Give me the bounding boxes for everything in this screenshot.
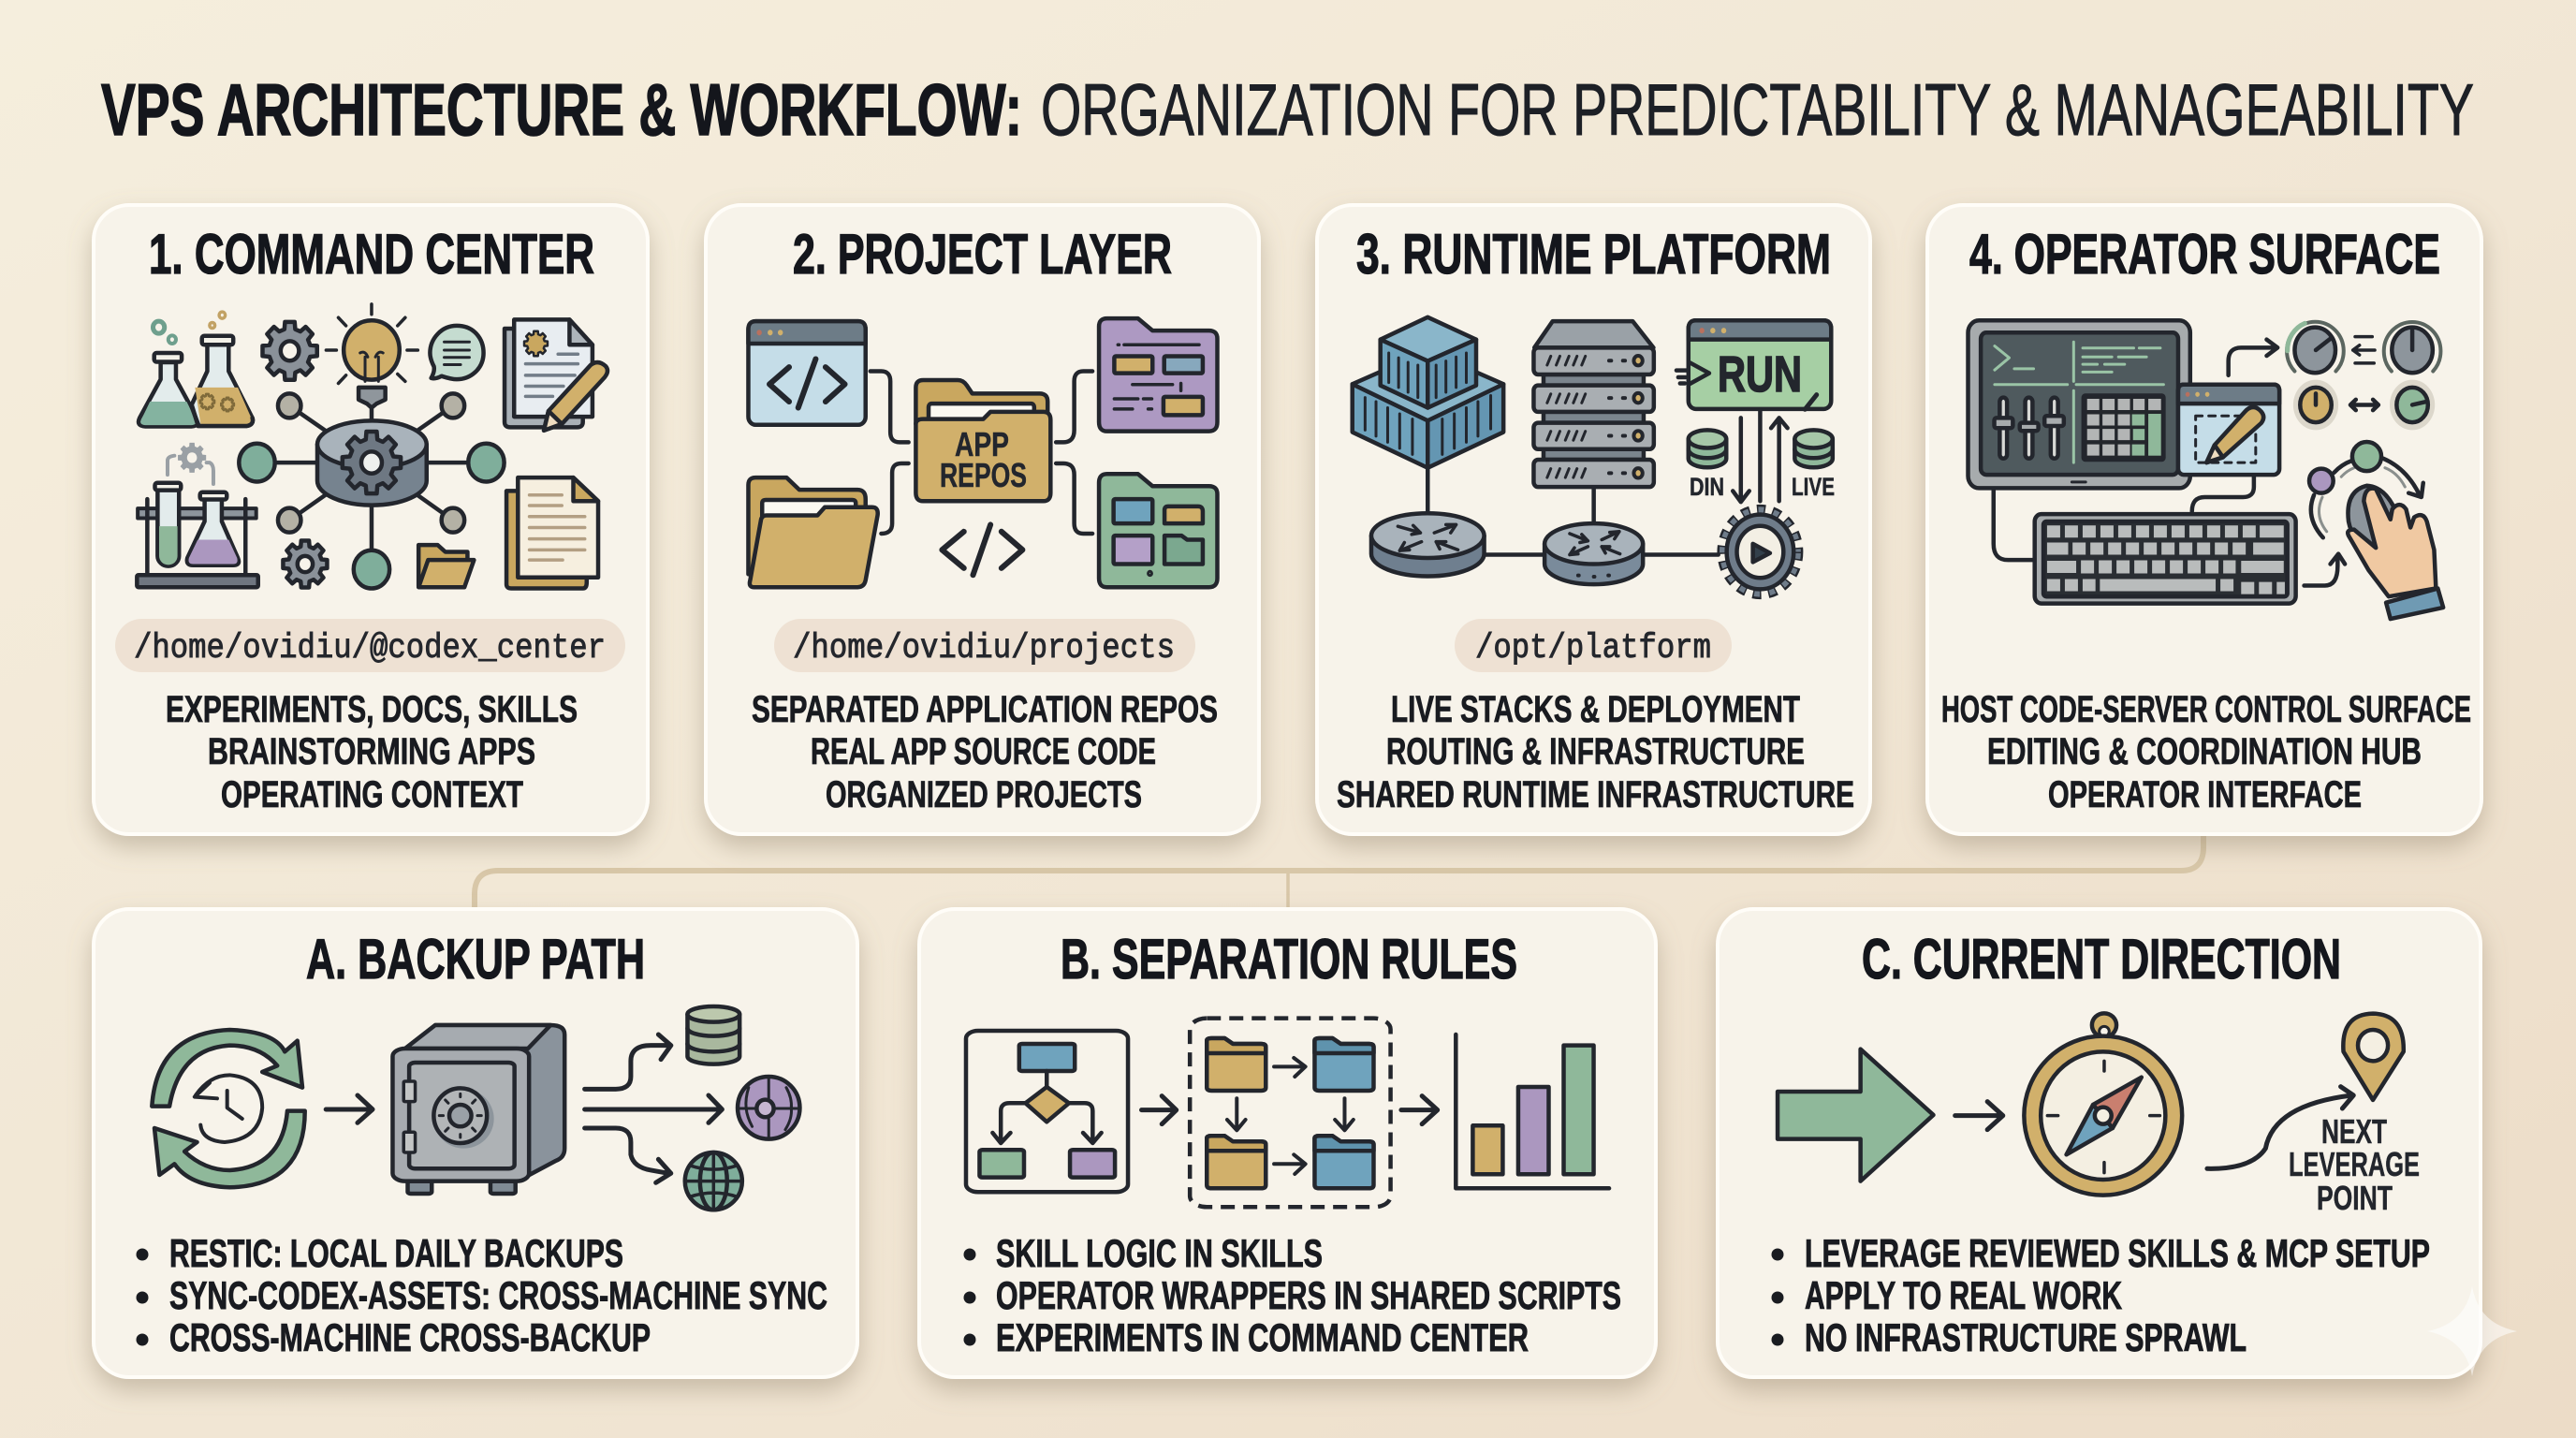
illustration: app repos folders	[748, 318, 1217, 587]
pin label: next leverage point: LEVERAGE	[2289, 1145, 2420, 1183]
title	[101, 68, 2474, 151]
description: runtime platform	[1337, 689, 1854, 815]
panel: backup path	[94, 909, 857, 1377]
terminal labels: run, din, live: RUN	[1718, 346, 1802, 403]
title: VPS ARCHITECTURE & WORKFLOW:	[101, 68, 1022, 151]
panel: operator surface	[1927, 205, 2481, 834]
terminal labels: run, din, live: DIN	[1690, 473, 1724, 501]
pin label: next leverage point: POINT	[2317, 1179, 2393, 1217]
path pill: opt platform	[1455, 619, 1732, 672]
pin label: next leverage point: NEXT	[2321, 1112, 2387, 1151]
description: operator surface: OPERATOR INTERFACE	[2048, 774, 2362, 815]
heading: current direction: C. CURRENT DIRECTION	[1862, 928, 2341, 990]
description: runtime platform: ROUTING & INFRASTRUCTURE	[1386, 731, 1805, 772]
description: project layer: ORGANIZED PROJECTS	[826, 774, 1142, 815]
bullet list: backup path	[137, 1231, 827, 1359]
bullet list: current direction: NO INFRASTRUCTURE SPRAWL	[1805, 1315, 2247, 1359]
folder label: app repos	[940, 425, 1027, 494]
bullet list: separation rules: SKILL LOGIC IN SKILLS	[996, 1231, 1323, 1275]
bullet list: separation rules	[964, 1231, 1621, 1359]
bullet list: current direction	[1771, 1231, 2430, 1359]
description: command center: EXPERIMENTS, DOCS, SKILLS	[166, 689, 578, 730]
path pill: codex center	[115, 619, 625, 672]
bullet list: separation rules: OPERATOR WRAPPERS IN SHARED SCRIPTS	[996, 1273, 1621, 1317]
panel: separation rules	[919, 909, 1656, 1377]
terminal labels: run, din, live: LIVE	[1792, 473, 1835, 501]
bullet list: backup path: SYNC-CODEX-ASSETS: CROSS-MACHINE SYNC	[169, 1273, 827, 1317]
path pill: opt platform: /opt/platform	[1475, 629, 1711, 668]
description: command center: OPERATING CONTEXT	[221, 774, 523, 815]
icon: sparkle watermark	[2427, 1286, 2517, 1376]
illustration: command center hub	[137, 304, 607, 589]
description: operator surface: EDITING & COORDINATION HUB	[1987, 731, 2422, 772]
illustration: backup to safe to targets	[152, 1006, 799, 1210]
panel: command center	[94, 205, 648, 834]
panel: current direction	[1718, 909, 2481, 1377]
terminal labels: run, din, live	[1690, 346, 1835, 501]
folder label: app repos: APP	[955, 425, 1009, 463]
description: runtime platform: SHARED RUNTIME INFRASTRUCTURE	[1337, 774, 1854, 815]
description: project layer: REAL APP SOURCE CODE	[811, 731, 1156, 772]
connector lines between rows	[475, 836, 2203, 907]
illustration: runtime containers, servers, routers	[1353, 317, 1833, 594]
panel: project layer	[706, 205, 1259, 834]
bullet list: backup path: RESTIC: LOCAL DAILY BACKUPS	[169, 1231, 623, 1275]
description: project layer: SEPARATED APPLICATION REPOS	[752, 689, 1218, 730]
heading: backup path: A. BACKUP PATH	[306, 928, 645, 990]
panel: runtime platform	[1317, 205, 1870, 834]
description: command center: BRAINSTORMING APPS	[208, 731, 535, 772]
description: project layer	[752, 689, 1218, 815]
heading: project layer: 2. PROJECT LAYER	[793, 223, 1172, 286]
illustration: arrow, compass, map pin	[1778, 1013, 2404, 1196]
heading: separation rules: B. SEPARATION RULES	[1061, 928, 1517, 990]
path pill: codex center: /home/ovidiu/@codex_center	[134, 629, 606, 668]
bullet list: separation rules: EXPERIMENTS IN COMMAND CENTER	[996, 1315, 1529, 1359]
pin label: next leverage point	[2289, 1112, 2420, 1217]
heading: runtime platform: 3. RUNTIME PLATFORM	[1356, 223, 1831, 286]
bullet list: current direction: APPLY TO REAL WORK	[1805, 1273, 2122, 1317]
description: operator surface	[1941, 689, 2471, 815]
heading: command center: 1. COMMAND CENTER	[149, 223, 594, 286]
description: command center	[166, 689, 578, 815]
bullet list: backup path: CROSS-MACHINE CROSS-BACKUP	[169, 1315, 651, 1359]
path pill: projects: /home/ovidiu/projects	[793, 629, 1175, 668]
path pill: projects	[774, 619, 1195, 672]
description: runtime platform: LIVE STACKS & DEPLOYMENT	[1391, 689, 1800, 730]
illustration: operator workstation	[1969, 320, 2443, 619]
illustration: flow, folders, bar chart	[966, 1019, 1609, 1207]
folder label: app repos: REPOS	[940, 456, 1027, 494]
